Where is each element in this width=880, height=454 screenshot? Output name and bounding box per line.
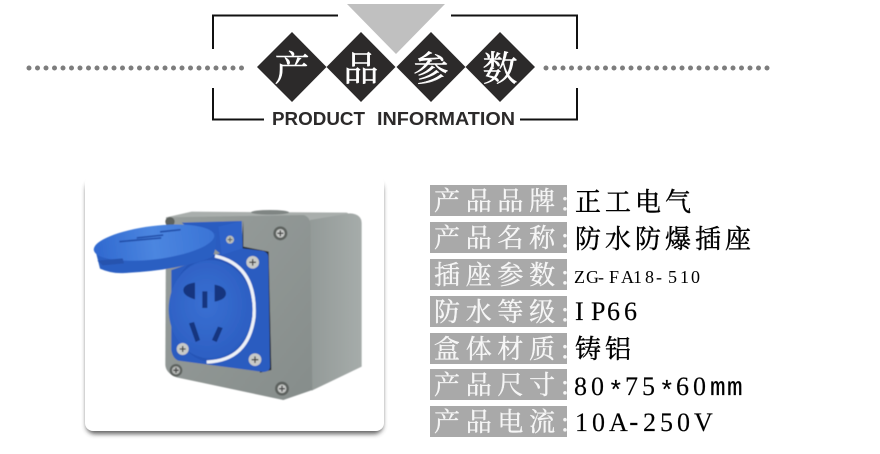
spec row: size: [430, 365, 743, 407]
spec row: size: 80: [574, 372, 604, 401]
spec row: waterproof rating: 防水等级:: [434, 292, 575, 329]
product photo card: [85, 175, 384, 434]
title diamonds: 参: [413, 42, 449, 92]
spec row: waterproof rating: [430, 292, 637, 329]
spec row: size: *: [608, 377, 624, 407]
header triangle: [347, 4, 445, 54]
spec row: current: [430, 402, 713, 439]
spec row: model: [430, 255, 700, 292]
subtitle: INFORMATION: [377, 109, 515, 129]
white ring: [171, 254, 256, 362]
spec row: name: 产品名称:: [434, 218, 575, 255]
spec row: size: *: [659, 377, 675, 407]
blue lid: [95, 225, 217, 273]
blue plate: [171, 221, 270, 372]
spec row: brand: [430, 181, 695, 219]
title diamonds: 产: [274, 42, 310, 92]
header frame: [213, 16, 577, 120]
spec row: size: 75: [625, 372, 655, 401]
hinge: [218, 221, 243, 255]
spec row: name: 防水防爆插座: [575, 219, 755, 256]
title diamonds: [257, 32, 535, 102]
spec row: material: 盒体材质:: [434, 329, 575, 366]
subtitle: PRODUCT: [272, 109, 365, 129]
black plate shadow: [240, 221, 271, 373]
socket holes: [183, 283, 226, 342]
dotted line right: [544, 66, 770, 70]
spec row: material: [430, 329, 635, 366]
spec row: current: 10A-250V: [575, 408, 713, 439]
spec row: size: 产品尺寸:: [434, 365, 575, 402]
spec row: brand: 产品品牌:: [434, 181, 575, 218]
subtitle: [272, 109, 515, 129]
plate screws: [246, 256, 259, 269]
spec row: model: ZG-FA18-510: [574, 267, 700, 287]
icon: socket box: [92, 210, 362, 400]
spec row: size: mm: [710, 373, 743, 403]
spec row: material: 铸铝: [575, 329, 635, 366]
spec row: name: [430, 218, 755, 256]
spec row: size: 60: [676, 372, 706, 401]
socket face: [169, 260, 253, 359]
spec row: model: 插座参数:: [434, 255, 575, 292]
dotted line left: [26, 66, 244, 70]
title diamonds: 品: [343, 42, 379, 92]
spec row: current: 产品电流:: [434, 402, 575, 439]
spec row: waterproof rating: IP66: [575, 297, 637, 326]
spec row: brand: 正工电气: [575, 182, 695, 219]
title diamonds: 数: [482, 42, 518, 92]
